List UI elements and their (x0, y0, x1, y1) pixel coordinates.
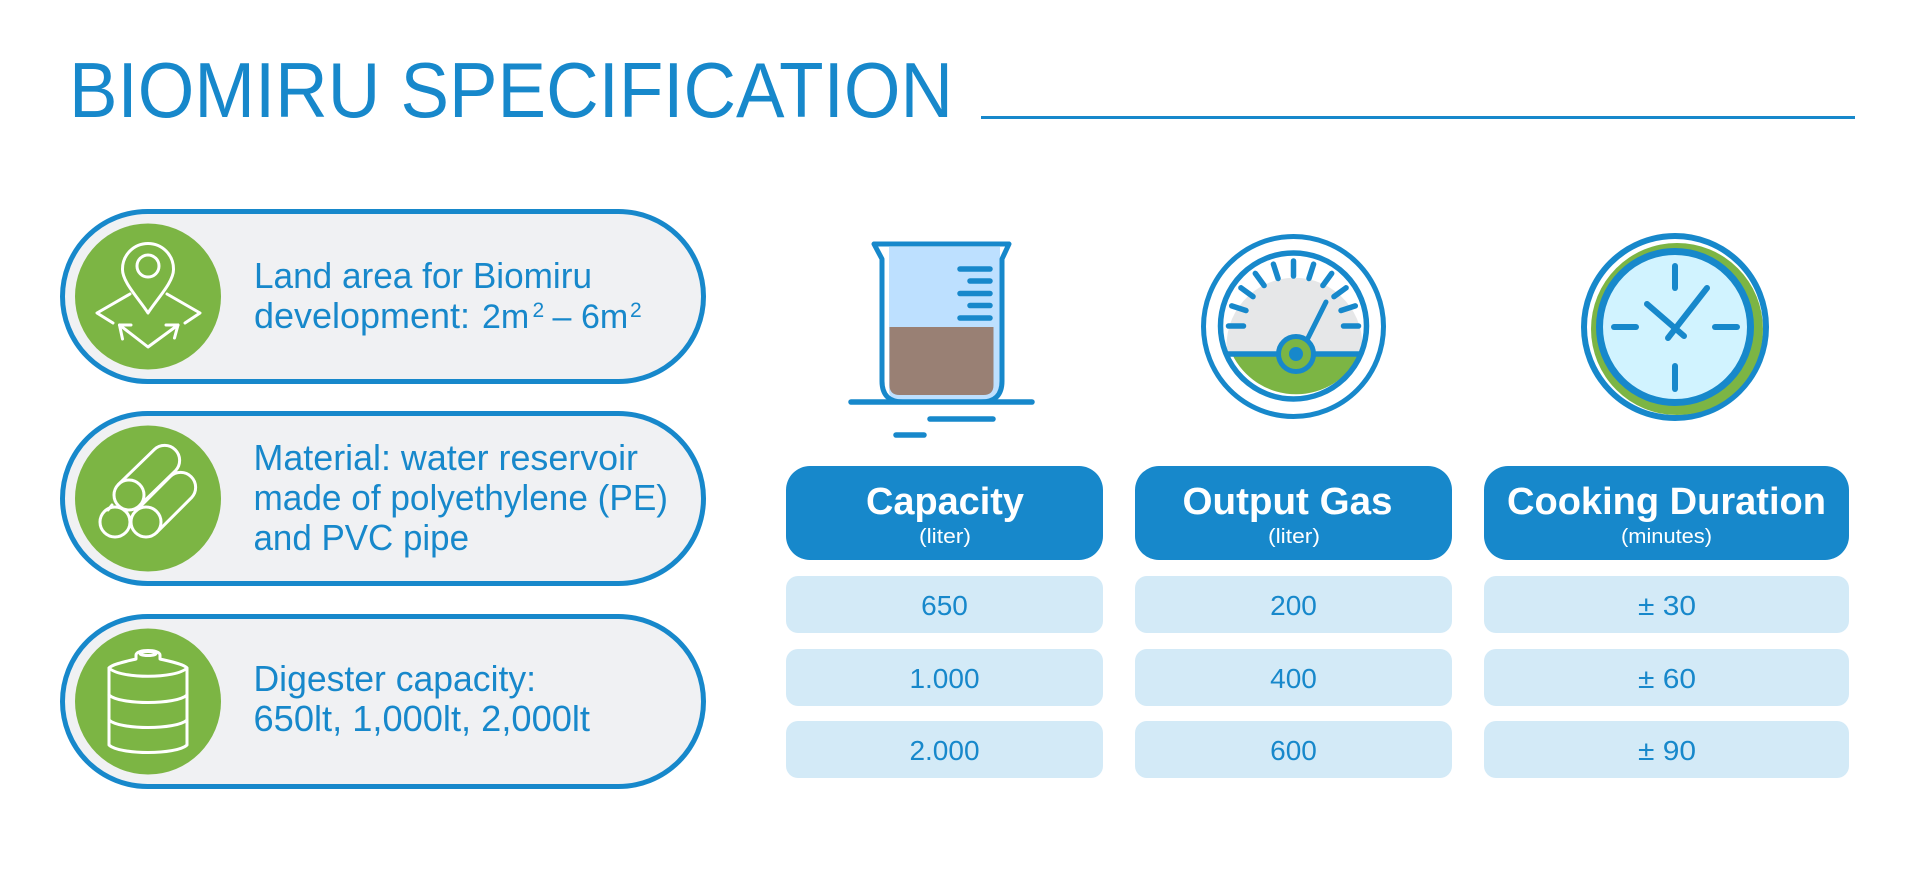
text: land area: Land area for Biomiru (254, 255, 592, 296)
icon: pipes (75, 426, 221, 572)
text: land area: 2 (532, 299, 544, 322)
text: land area: 2m (482, 298, 529, 336)
text: material: Material: water reservoir (254, 437, 638, 478)
cell: plus-minus 90 (1484, 721, 1849, 778)
cell: 600: 600 (1270, 735, 1317, 766)
cell: plus-minus 30 (1484, 576, 1849, 633)
header: cooking duration: (minutes) (1621, 526, 1712, 548)
header: capacity (786, 466, 1103, 560)
cell: 600 (1135, 721, 1452, 778)
icon: clock (1584, 236, 1766, 418)
column: capacity (786, 466, 1103, 778)
header: output gas: Output Gas (1182, 481, 1392, 523)
cell: 650: 650 (921, 590, 968, 621)
cell: plus-minus 90: ± 90 (1638, 735, 1696, 766)
header: output gas: (liter) (1268, 526, 1320, 548)
icon: map pin with area arrows (75, 224, 221, 370)
cell: 200 (1135, 576, 1452, 633)
text: digester capacity (254, 658, 590, 739)
header: output gas (1135, 466, 1452, 560)
cell: 1.000: 1.000 (909, 663, 980, 694)
header: cooking duration: Cooking Duration (1507, 481, 1826, 523)
cell: 400 (1135, 649, 1452, 706)
text: land area: development: (254, 295, 470, 336)
text: material: and PVC pipe (254, 517, 469, 558)
column: output gas (1135, 466, 1452, 778)
text: material: made of polyethylene (PE) (254, 477, 668, 518)
cell: plus-minus 60 (1484, 649, 1849, 706)
text: material (254, 437, 668, 558)
cell: 1.000 (786, 649, 1103, 706)
text: land area (254, 255, 642, 336)
text: digester capacity: Digester capacity: (254, 658, 536, 699)
cell: 400: 400 (1270, 663, 1317, 694)
panel: material (62, 414, 704, 584)
text: digester capacity: 650lt, 1,000lt, 2,000lt (254, 698, 590, 739)
cell: plus-minus 30: ± 30 (1638, 590, 1696, 621)
column: cooking duration (1484, 466, 1849, 778)
cell: 650 (786, 576, 1103, 633)
cell: 200: 200 (1270, 590, 1317, 621)
cell: 2.000 (786, 721, 1103, 778)
text: land area: – (552, 298, 572, 336)
icon: water tank (75, 628, 221, 774)
panel: digester capacity (62, 616, 704, 786)
header: capacity: Capacity (866, 481, 1024, 523)
cell: plus-minus 60: ± 60 (1638, 663, 1696, 694)
text: land area: 6m (581, 298, 628, 336)
icon: gauge (1204, 236, 1384, 416)
panel: land area (62, 212, 704, 382)
title: BIOMIRU SPECIFICATION (69, 46, 953, 134)
icon: beaker (851, 244, 1032, 435)
cell: 2.000: 2.000 (909, 735, 980, 766)
header: capacity: (liter) (919, 526, 971, 548)
header: cooking duration (1484, 466, 1849, 560)
text: land area: 2 (630, 299, 642, 322)
